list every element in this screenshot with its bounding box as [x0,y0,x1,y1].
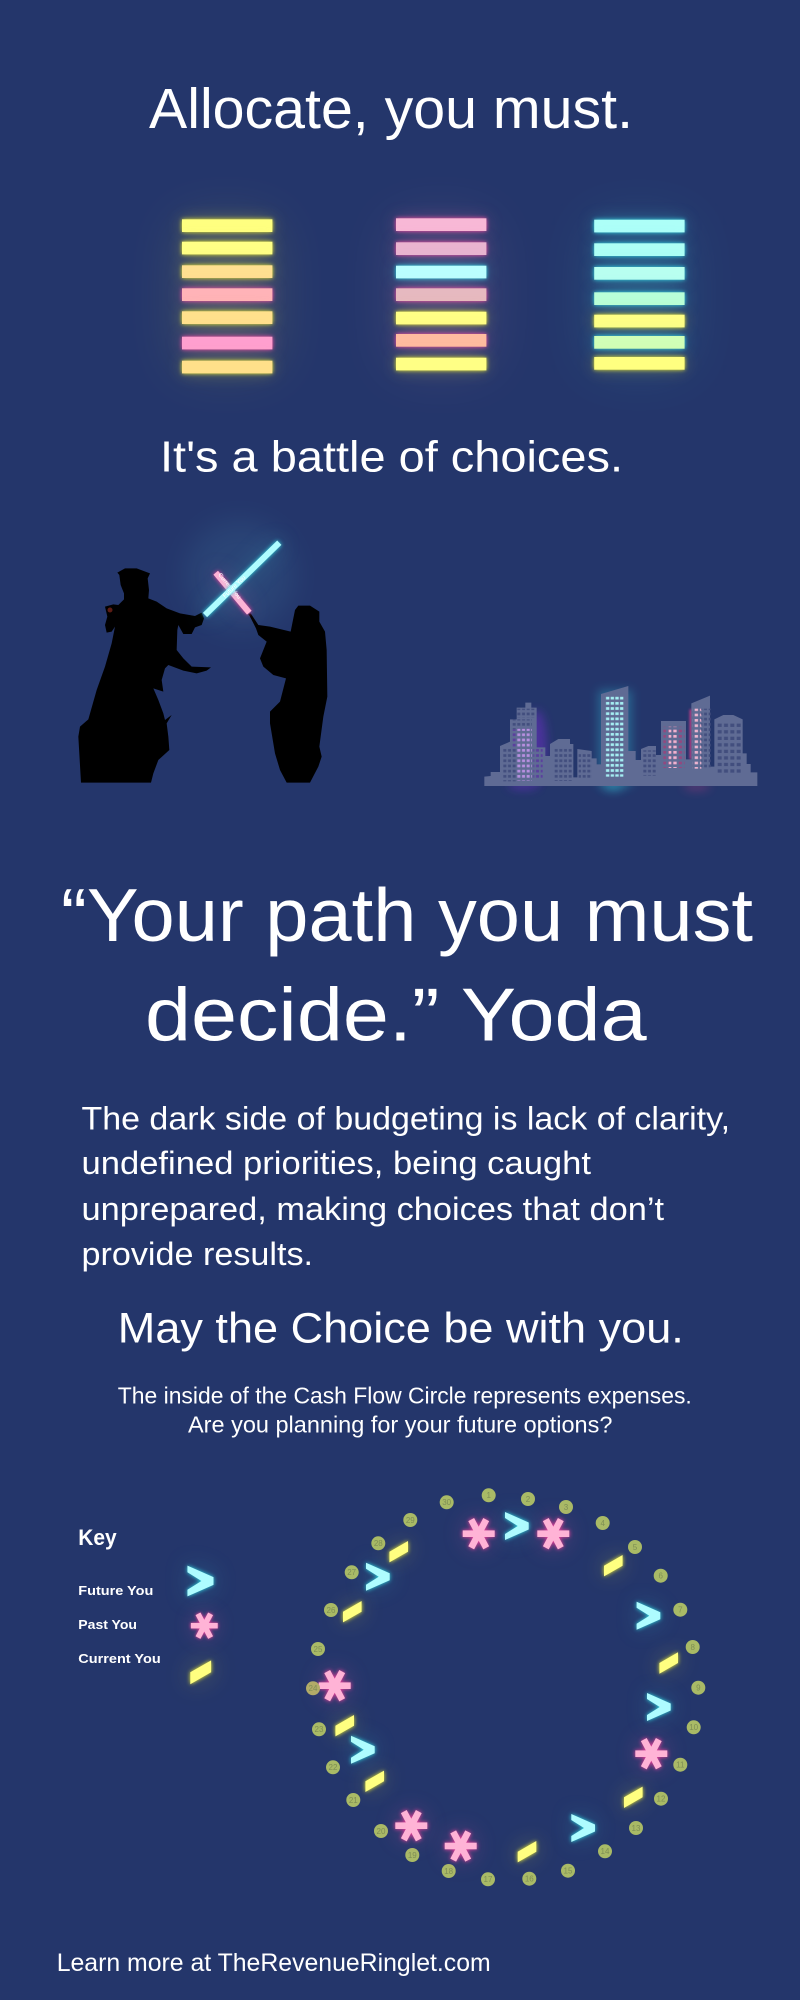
past you asterisks [319,1518,667,1862]
lightsaber: pink: Current You [216,572,241,601]
numbered day badges: 28 [374,1539,383,1548]
current you slashes [335,1541,678,1862]
body paragraph [82,1100,730,1272]
building windows [502,695,741,781]
numbered day badges: 9 [696,1684,701,1692]
panel: cash flow circle [306,1488,705,1886]
icon: key chevron [187,1566,214,1596]
numbered day badges: 4 [600,1519,605,1528]
key label: future you: Future You [78,1583,153,1598]
subheading: It's a battle of choices. [160,433,623,482]
numbered day badges: 26 [327,1606,336,1615]
numbered day badges: 23 [315,1725,324,1734]
lightsaber: pink [213,571,252,615]
key heading: Key [78,1525,117,1550]
numbered day badges: 8 [690,1643,695,1652]
day badge 24: 24 [309,1684,318,1693]
tagline: May the Choice be with you. [118,1305,684,1353]
bar column: yellow [182,219,272,373]
future you chevrons [351,1512,671,1842]
numbered day badges: 21 [349,1796,358,1805]
title: Allocate, you must. [149,77,633,141]
icon: key asterisk [191,1613,218,1639]
cash flow intro: The inside of the Cash Flow Circle represents expenses. [118,1382,692,1408]
numbered day badges: 2 [526,1495,531,1504]
numbered day badges: 29 [406,1516,415,1525]
numbered day badges: 27 [347,1568,357,1577]
quote heading: “Your path you must [61,873,753,957]
bar column: cyan [594,220,685,370]
body paragraph: unprepared, making choices that don’t [82,1191,664,1227]
red glove detail [108,608,112,612]
lightsaber: cyan: Future You [222,575,247,599]
numbered day badges: 10 [689,1723,699,1732]
numbered day badges: 6 [658,1572,663,1580]
quote heading: decide.” Yoda [145,973,647,1057]
illustration: lightsaber duel [78,520,327,783]
numbered day badges: 15 [564,1866,573,1876]
numbered day badges: 14 [601,1847,610,1856]
numbered day badges: 19 [408,1851,417,1860]
body paragraph: provide results. [82,1236,313,1272]
silhouette: right fighter [248,606,327,783]
numbered day badges: 1 [486,1491,491,1500]
key label: past you: Past You [78,1617,137,1632]
numbered day badges: 13 [632,1824,641,1833]
panel: key [78,1525,218,1684]
numbered day badges: 16 [525,1874,534,1884]
illustration: neon city skyline [484,686,757,790]
skyline silhouette [484,686,757,786]
cash flow intro [118,1382,692,1438]
body paragraph: The dark side of budgeting is lack of clarity, [82,1100,730,1136]
numbered day badges: 22 [329,1763,338,1772]
quote heading [61,873,753,1057]
body paragraph: undefined priorities, being caught [82,1145,591,1181]
numbered day badges: 18 [444,1867,454,1876]
key label: current you: Current You [78,1651,161,1666]
numbered day badges: 5 [633,1543,638,1552]
bar column: pink [396,218,486,370]
icon: key slash [190,1660,211,1684]
numbered day badges: 12 [657,1794,666,1804]
silhouette: left fighter [78,568,211,783]
numbered day badges: 7 [678,1606,683,1614]
numbered day badges: 25 [314,1645,323,1654]
numbered day badges: 30 [442,1498,452,1507]
cash flow intro: Are you planning for your future options? [188,1412,612,1438]
panel: neon budget bars [182,218,685,373]
numbered day badges: 11 [676,1760,685,1770]
numbered day badges: 20 [377,1827,386,1836]
lightsaber: cyan [203,541,281,617]
numbered day badges: 17 [484,1875,493,1884]
numbered day badges: 3 [564,1503,569,1512]
day badge 24 [306,1681,320,1695]
numbered day badges [311,1488,705,1886]
footer link: Learn more at TheRevenueRinglet.com [57,1949,491,1977]
